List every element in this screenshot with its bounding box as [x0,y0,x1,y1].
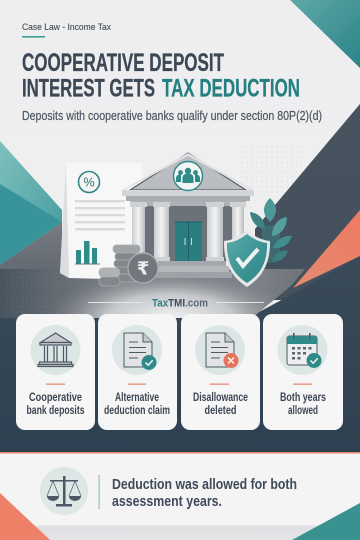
bottom orange corner [0,493,50,540]
kicker label: Case Law - Income Tax [22,22,111,33]
conclusion text: Deduction was allowed for both [112,477,297,493]
accent rule [22,36,45,38]
coins with rupee [99,245,158,286]
leaves [250,198,292,263]
card: cooperative bank deposits: bank deposits [26,403,85,417]
icon: document with check [124,333,156,370]
dot texture [240,145,302,195]
conclusion panel [0,452,360,526]
card: alternative deduction claim [98,314,177,430]
brand lines [88,302,264,303]
conclusion text [112,477,297,510]
document with percent and bar chart: % [83,176,95,190]
bank building [122,153,254,278]
title: TAX DEDUCTION [162,74,300,102]
decorative corner: top right teal triangle [290,0,360,68]
document with percent and bar chart [60,163,142,280]
title [22,49,300,102]
dark backdrop panel [0,104,360,320]
conclusion text: assessment years. [112,494,222,510]
left dot texture [3,272,58,314]
title: INTEREST GETS [22,74,155,102]
card: both years allowed: allowed [288,403,318,417]
card: disallowance deleted [181,314,260,430]
lower dark band [0,256,360,452]
icon: document with cross [206,333,238,368]
icon: scales of justice [40,467,88,515]
icon: calendar with check [287,333,322,368]
decorative orange wedge [293,210,360,288]
floor [0,269,305,318]
card: both years allowed: Both years [280,390,326,404]
bottom teal corner [292,503,360,540]
card: both years allowed [263,314,343,430]
shield with check [224,230,270,287]
card: cooperative bank deposits: Cooperative [29,390,82,404]
card: disallowance deleted: deleted [204,403,236,417]
card: alternative deduction claim: Alternative [115,390,159,404]
card: cooperative bank deposits [16,314,95,430]
title: COOPERATIVE DEPOSIT [22,49,224,77]
coins with rupee: ₹ [137,258,149,280]
icon: bank [38,333,73,366]
bottom background [0,452,360,540]
card: alternative deduction claim: deduction claim [104,403,170,417]
card: disallowance deleted: Disallowance [193,390,248,404]
brand: TaxTMI.com [152,298,208,310]
icon: people group [176,168,200,183]
decorative left teal triangle [0,141,62,265]
